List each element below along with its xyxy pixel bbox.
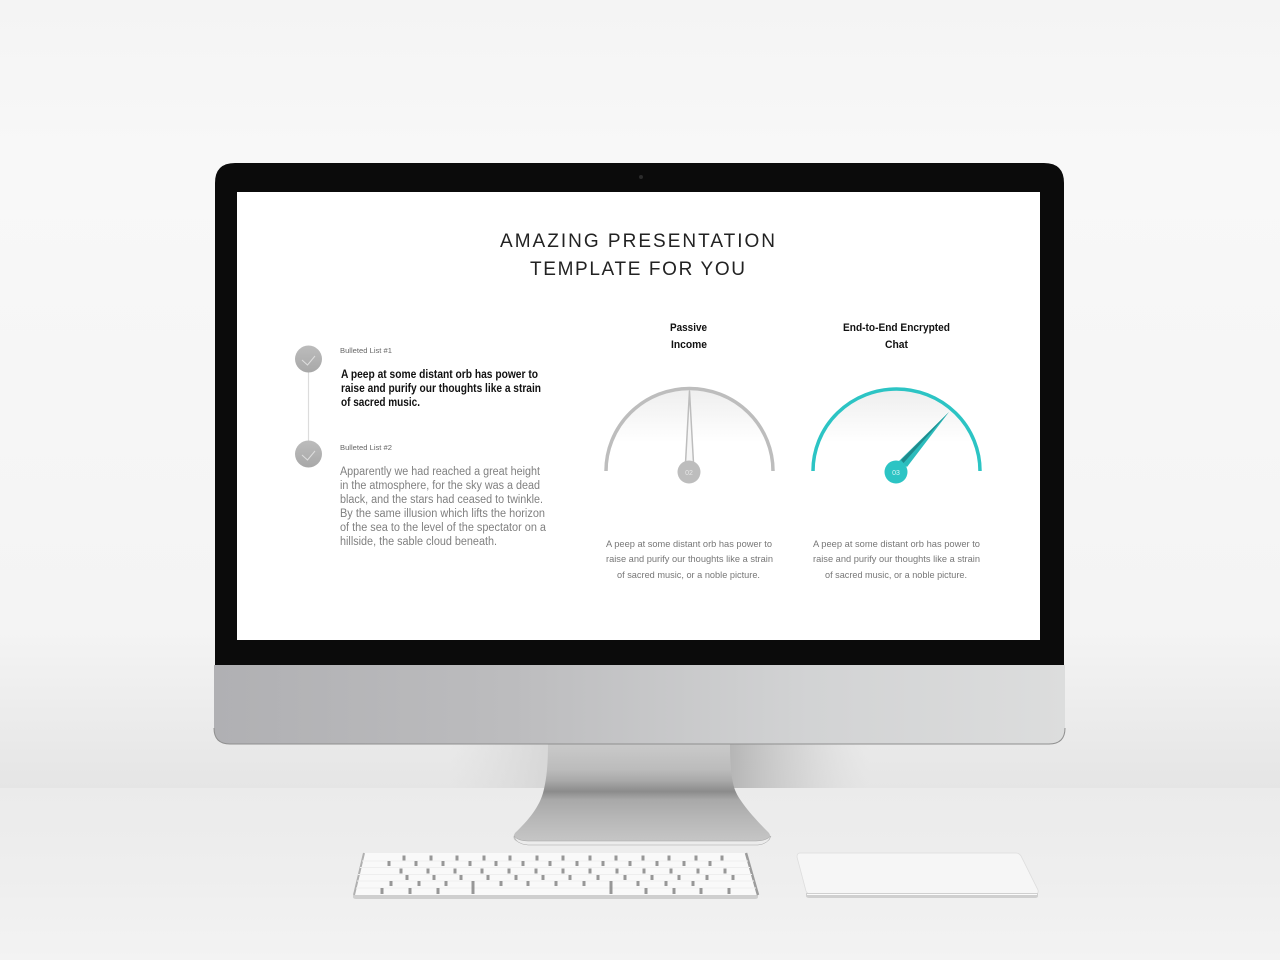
paragraph: By the same illusion which lifts the horizon xyxy=(340,508,545,520)
bold statement: of sacred music. xyxy=(341,397,420,409)
description: of sacred music, or a noble picture. xyxy=(617,570,760,581)
description: raise and purify our thoughts like a strain xyxy=(606,554,773,565)
key row lines xyxy=(356,861,756,888)
paragraph: in the atmosphere, for the sky was a dead xyxy=(340,480,540,492)
panel: bulleted list xyxy=(295,346,547,548)
heading: Income xyxy=(671,339,707,351)
gauge needle xyxy=(686,391,694,463)
keyboard xyxy=(353,853,758,899)
heading xyxy=(670,322,707,351)
gauge hub xyxy=(678,460,700,484)
shadow behind stand xyxy=(450,744,869,788)
monitor bezel xyxy=(215,163,1064,665)
timeline connector xyxy=(308,372,310,441)
gauge hub: 03 xyxy=(892,470,900,477)
panel: passive income gauge xyxy=(606,322,773,581)
label: bulleted list 1: Bulleted List #1 xyxy=(340,348,392,355)
heading xyxy=(843,322,950,351)
paragraph: of the sea to the level of the spectator on a xyxy=(340,522,547,534)
heading: Chat xyxy=(885,339,908,351)
monitor chin xyxy=(214,665,1065,744)
heading: Passive xyxy=(670,322,707,334)
desk surface xyxy=(0,788,1280,960)
gauge dial xyxy=(813,389,980,471)
bold statement: raise and purify our thoughts like a strain xyxy=(341,383,541,395)
paragraph: black, and the stars had ceased to twinkle. xyxy=(340,494,543,506)
monitor xyxy=(214,163,1065,744)
title: AMAZING PRESENTATION xyxy=(500,231,775,252)
icon: check badge 2 xyxy=(295,440,322,468)
panel: encrypted chat gauge xyxy=(813,322,980,581)
title xyxy=(500,231,775,280)
gauge dial xyxy=(606,389,773,471)
description: of sacred music, or a noble picture. xyxy=(825,570,967,581)
camera xyxy=(639,175,643,179)
bold statement xyxy=(341,369,541,409)
description: A peep at some distant orb has power to xyxy=(813,539,980,550)
paragraph xyxy=(340,466,547,548)
icon: check badge 1 xyxy=(295,346,322,372)
label: bulleted list 2: Bulleted List #2 xyxy=(340,445,392,452)
description xyxy=(813,539,980,581)
paragraph: Apparently we had reached a great height xyxy=(340,466,541,478)
gauge needle xyxy=(899,412,949,467)
description: raise and purify our thoughts like a strain xyxy=(813,554,980,565)
screen xyxy=(237,192,1040,640)
trackpad xyxy=(797,853,1038,898)
gauge hub: 02 xyxy=(685,470,693,477)
heading: End-to-End Encrypted xyxy=(843,322,950,334)
description: A peep at some distant orb has power to xyxy=(606,539,772,550)
key gaps xyxy=(382,856,733,894)
gauge hub xyxy=(884,460,908,484)
monitor stand xyxy=(514,744,771,845)
paragraph: hillside, the sable cloud beneath. xyxy=(340,536,497,548)
bold statement: A peep at some distant orb has power to xyxy=(341,369,538,381)
title: TEMPLATE FOR YOU xyxy=(530,259,745,280)
description xyxy=(606,539,773,581)
